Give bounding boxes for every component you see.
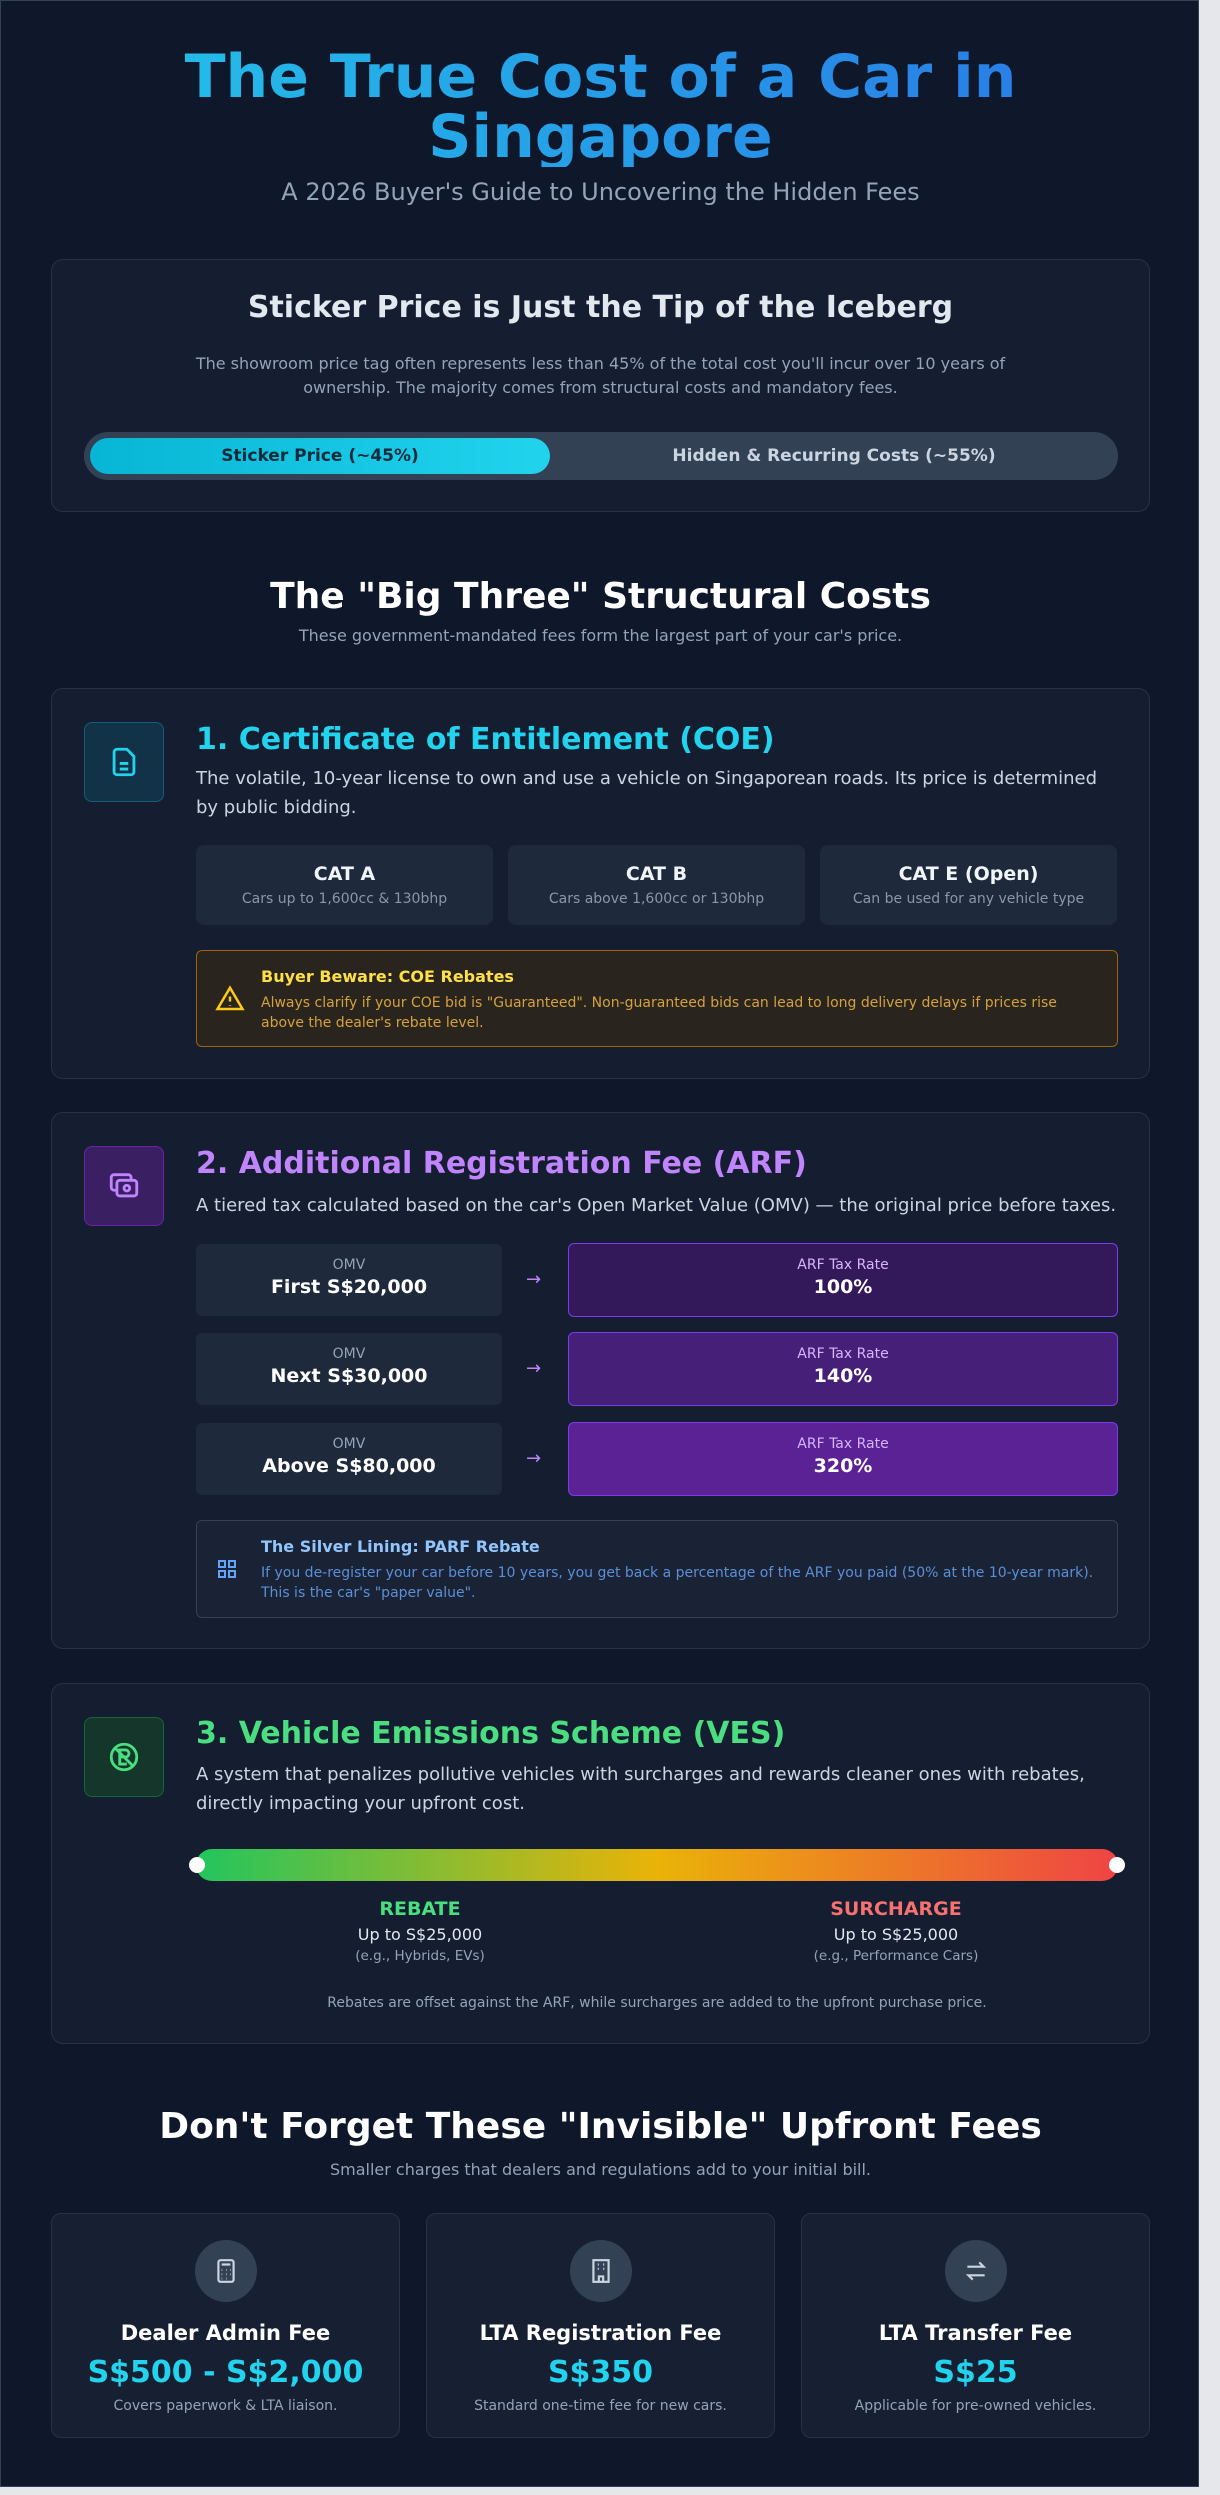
CAT E: CAT E (Open) [899,863,1038,885]
COE description: The volatile, 10-year license to own and use a vehicle on Singaporean roads. Its price is determined by public bidding. [196,768,1097,818]
panel: ARF: ARF Tax Rate [797,1436,889,1452]
hidden segment label: Hidden & Recurring Costs (~55%) [672,446,996,466]
card: dealer admin fee: S$500 - S$2,000 [88,2355,363,2390]
panel: ARF: 100% [814,1276,872,1298]
card: LTA transfer fee: Applicable for pre-owned vehicles. [855,2398,1096,2414]
icon: grid [218,1560,236,1578]
rebate label: Up to S$25,000 [358,1925,482,1944]
tier 3: OMV [333,1436,365,1452]
card: LTA transfer fee [801,2213,1150,2438]
cost split bar [84,432,1118,480]
CAT E [820,845,1117,925]
icon: money [84,1146,164,1226]
card: dealer admin fee: Covers paperwork & LTA liaison. [114,2398,337,2414]
tier 3: Above S$80,000 [262,1455,436,1477]
rebate label: (e.g., Hybrids, EVs) [355,1948,485,1964]
icon: document [84,722,164,802]
subtitle: A 2026 Buyer's Guide to Uncovering the Hidden Fees [281,178,920,206]
section subtitle: Smaller charges that dealers and regulations add to your initial bill. [330,2160,871,2179]
callout: PARF rebate [196,1520,1118,1618]
callout: PARF rebate: If you de-register your car before 10 years, you get back a percentage of the ARF you paid (50% at the 10-year mark). This is the car's "paper value". [261,1565,1093,1601]
card: LTA registration fee [426,2213,775,2438]
panel text: The showroom price tag often represents less than 45% of the total cost you'll incur over 10 years of ownership. The majority comes from structural costs and mandatory fees. [196,354,1005,397]
panel: ARF: → [526,1269,541,1290]
panel: ARF: 140% [814,1365,872,1387]
surcharge label: (e.g., Performance Cars) [814,1948,978,1964]
card: dealer admin fee [51,2213,400,2438]
heading ARF: 2. Additional Registration Fee (ARF) [196,1146,807,1181]
CAT E: Can be used for any vehicle type [853,891,1084,907]
card: LTA registration fee: Standard one-time fee for new cars. [474,2398,727,2414]
surcharge label: Up to S$25,000 [834,1925,958,1944]
gradient scale [196,1849,1118,1881]
tier 1: First S$20,000 [271,1276,427,1298]
panel: ARF: 320% [814,1455,872,1477]
sticker segment: Sticker Price (~45%) [221,446,419,466]
icon: transfer arrows [944,2240,1006,2302]
CAT B [508,845,805,925]
rebate label [355,1898,485,1964]
VES description: A system that penalizes pollutive vehicles with surcharges and rewards cleaner ones with rebates, directly impacting your upfront cost. [196,1764,1085,1814]
tier 1: OMV [333,1257,365,1273]
panel: ARF: ARF Tax Rate [797,1257,889,1273]
panel heading: Sticker Price is Just the Tip of the Iceberg [248,290,953,325]
CAT B: CAT B [626,863,687,885]
heading VES: 3. Vehicle Emissions Scheme (VES) [196,1716,785,1751]
surcharge label [814,1898,978,1964]
tier 2 [196,1333,502,1405]
CAT A: Cars up to 1,600cc & 130bhp [242,891,447,907]
section heading: invisible fees: Don't Forget These "Invisible" Upfront Fees [159,2106,1042,2147]
callout: buyer beware [196,950,1118,1047]
rebate label: REBATE [379,1898,461,1920]
callout: buyer beware: Buyer Beware: COE Rebates [261,967,514,986]
icon: building [570,2240,632,2302]
callout: buyer beware: Always clarify if your COE bid is "Guaranteed". Non-guaranteed bids can lead to long delivery delays if prices rise above the dealer's rebate level. [261,995,1057,1031]
ARF description: A tiered tax calculated based on the car's Open Market Value (OMV) — the original price before taxes. [196,1195,1116,1216]
card: LTA registration fee: S$350 [548,2355,653,2390]
panel: ARF: → [526,1358,541,1379]
section heading: big three: The "Big Three" Structural Costs [270,576,931,617]
icon: warning [215,985,245,1010]
card: LTA registration fee: LTA Registration Fee [480,2321,721,2345]
panel: ARF: ARF Tax Rate [797,1346,889,1362]
tier 3 [196,1423,502,1495]
tier 1 [196,1244,502,1316]
tier 2: OMV [333,1346,365,1362]
card: LTA transfer fee: LTA Transfer Fee [879,2321,1072,2345]
icon: calculator [194,2240,256,2302]
panel: COE [51,688,1150,1079]
surcharge label: SURCHARGE [830,1898,962,1920]
heading COE: 1. Certificate of Entitlement (COE) [196,722,775,757]
callout: PARF rebate: The Silver Lining: PARF Rebate [261,1537,540,1556]
panel: sticker price [51,259,1150,512]
title [1,47,1200,167]
card: LTA transfer fee: S$25 [933,2355,1018,2390]
CAT B: Cars above 1,600cc or 130bhp [549,891,764,907]
section subtitle: These government-mandated fees form the largest part of your car's price. [299,626,902,645]
tier 2: Next S$30,000 [271,1365,427,1387]
panel: VES [51,1683,1150,2044]
CAT A [196,845,493,925]
panel: ARF: → [526,1448,541,1469]
sticker segment [90,438,550,474]
panel: ARF [51,1112,1150,1649]
VES note: Rebates are offset against the ARF, while surcharges are added to the upfront purchase price. [327,1995,987,2011]
CAT A: CAT A [314,863,375,885]
card: dealer admin fee: Dealer Admin Fee [121,2321,330,2345]
icon: leaf [84,1717,164,1797]
